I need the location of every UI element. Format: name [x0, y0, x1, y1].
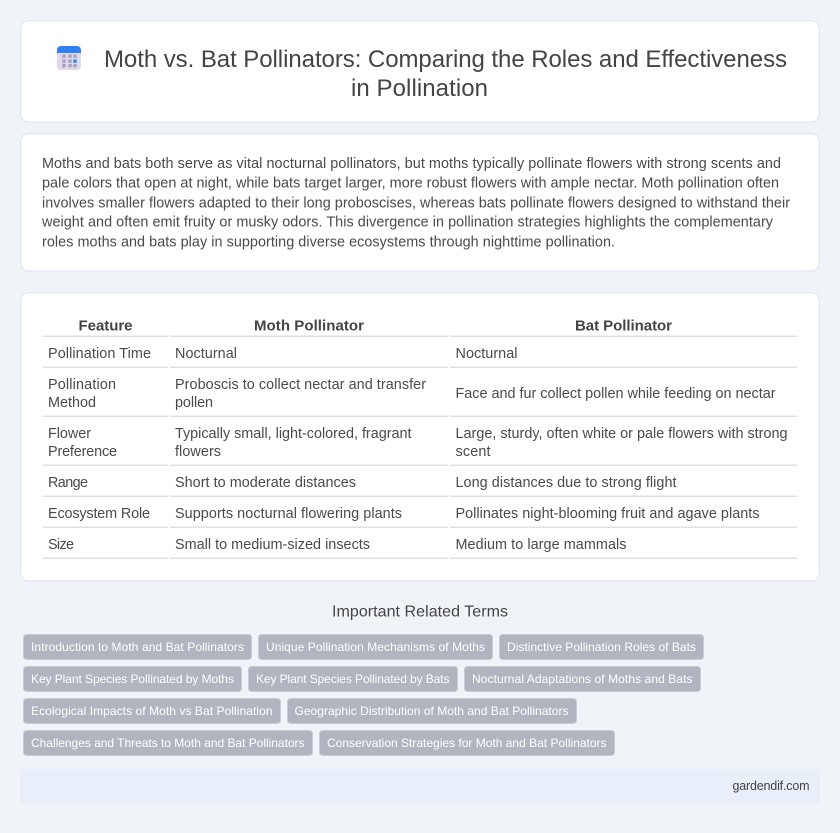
row: ecosystem role — [48, 506, 760, 522]
title — [104, 46, 787, 102]
tag — [320, 730, 614, 756]
heading: important related terms: Important Related Terms — [332, 604, 508, 620]
table header — [78, 318, 672, 334]
icon: calendar — [57, 46, 81, 70]
panel: intro text — [21, 134, 819, 271]
footer: gardendif.com — [732, 779, 810, 793]
tag: Introduction to Moth and Bat Pollinators — [31, 640, 244, 654]
row: pollination method: Method — [48, 395, 96, 411]
footer — [20, 769, 820, 803]
row: size: Medium to large mammals — [456, 537, 626, 553]
tag — [24, 698, 280, 724]
row: ecosystem role: Pollinates night-blooming fruit and agave plants — [456, 506, 760, 522]
text block: introduction: involves smaller flowers adapted to their long proboscises, whereas bats pollinate flowers designed to withstand their — [42, 196, 790, 212]
tag: Nocturnal Adaptations of Moths and Bats — [472, 672, 692, 686]
text block: introduction — [41, 156, 790, 250]
row: flower preference: Flower — [48, 426, 91, 442]
row: range: Range — [48, 475, 88, 491]
text block: introduction: pale colors that open at night, while bats target larger, more robust flowers with ample nectar. Moth pollination often — [42, 176, 779, 192]
tag: Geographic Distribution of Moth and Bat Pollinators — [294, 704, 568, 718]
table header: Bat Pollinator — [575, 318, 672, 334]
row: pollination method: Pollination — [48, 377, 116, 393]
row: range: Long distances due to strong flight — [456, 475, 676, 491]
row: size — [48, 537, 626, 553]
row: pollination method — [48, 377, 776, 411]
tag: Key Plant Species Pollinated by Moths — [31, 672, 234, 686]
tag — [500, 634, 704, 660]
row: range — [48, 475, 676, 491]
tag: Distinctive Pollination Roles of Bats — [507, 640, 696, 654]
tag — [24, 634, 252, 660]
row: pollination method: Face and fur collect pollen while feeding on nectar — [456, 386, 776, 402]
tag: Unique Pollination Mechanisms of Moths — [266, 640, 485, 654]
row: pollination time — [48, 346, 518, 362]
title: in Pollination — [351, 75, 488, 102]
panel: title header — [21, 21, 819, 122]
row: ecosystem role: Supports nocturnal flowering plants — [175, 506, 402, 522]
tag: Ecological Impacts of Moth vs Bat Pollination — [31, 704, 272, 718]
tag — [24, 730, 312, 756]
row: pollination time: Nocturnal — [175, 346, 237, 362]
tag — [248, 666, 458, 692]
tag: Conservation Strategies for Moth and Bat Pollinators — [327, 736, 606, 750]
row: flower preference: Large, sturdy, often white or pale flowers with strong — [456, 426, 788, 442]
text block: introduction: weight and often emit fruity or musky odors. This divergence in pollination strategies highlights the complementary — [41, 214, 774, 230]
row: flower preference: Preference — [48, 444, 117, 460]
title: Moth vs. Bat Pollinators: Comparing the Roles and Effectiveness — [104, 46, 787, 73]
row: range: Short to moderate distances — [175, 475, 356, 491]
row: flower preference — [48, 426, 788, 460]
text block: introduction: roles moths and bats play in supporting diverse ecosystems through nighttime pollination. — [42, 234, 615, 250]
tag — [258, 634, 492, 660]
row: flower preference: Typically small, light-colored, fragrant — [175, 426, 412, 442]
row: flower preference: flowers — [175, 444, 221, 460]
tag — [464, 666, 700, 692]
row: pollination time: Nocturnal — [456, 346, 518, 362]
row: pollination method: Proboscis to collect nectar and transfer — [175, 377, 426, 393]
row: flower preference: scent — [456, 444, 490, 460]
row: pollination method: pollen — [175, 395, 213, 411]
row: size: Small to medium-sized insects — [175, 537, 370, 553]
text block: introduction: Moths and bats both serve as vital nocturnal pollinators, but moths typically pollinate flowers with strong scents and — [42, 156, 781, 172]
row: size: Size — [48, 537, 74, 553]
tag: Key Plant Species Pollinated by Bats — [256, 672, 450, 686]
row: pollination time: Pollination Time — [48, 346, 151, 362]
table header: Feature — [78, 318, 132, 334]
tag — [288, 698, 576, 724]
row: ecosystem role: Ecosystem Role — [48, 506, 150, 522]
panel: comparison table — [21, 293, 819, 581]
panel: related term tags — [24, 634, 704, 756]
tag — [24, 666, 242, 692]
tag: Challenges and Threats to Moth and Bat Pollinators — [31, 736, 304, 750]
table header: Moth Pollinator — [254, 318, 364, 334]
